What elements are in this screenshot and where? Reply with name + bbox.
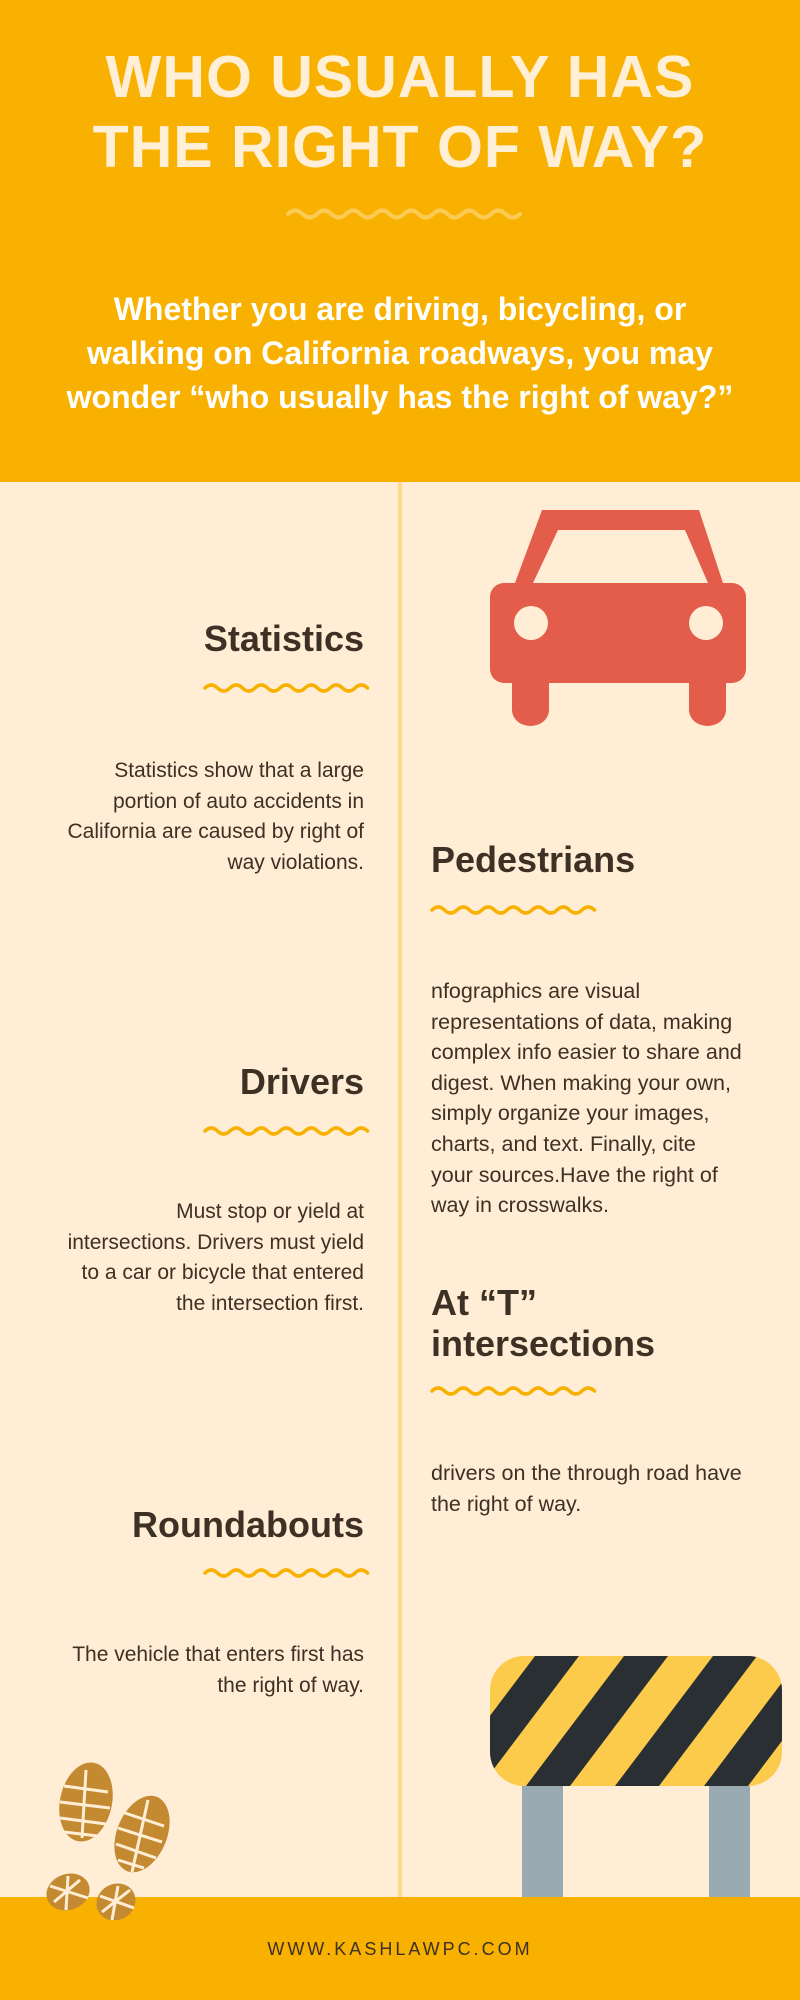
title: THE RIGHT OF WAY?: [93, 114, 707, 180]
subtitle: [66, 291, 733, 415]
text: pedestrians: [431, 979, 742, 1217]
heading: Statistics: Statistics: [204, 618, 364, 659]
text: pedestrians: nfographics are visual: [431, 979, 640, 1003]
subtitle: wonder “who usually has the right of way?”: [67, 379, 733, 415]
footer band: [0, 1897, 800, 2000]
icon: car: [490, 510, 746, 726]
header band: [0, 0, 800, 482]
center divider: [398, 482, 402, 1897]
text: pedestrians: charts, and text. Finally, cite: [431, 1132, 696, 1156]
text: pedestrians: simply organize your images,: [431, 1101, 709, 1125]
text: statistics: portion of auto accidents in: [113, 790, 364, 813]
text: T intersections: drivers on the through road have: [431, 1461, 742, 1485]
text: pedestrians: representations of data, making: [431, 1010, 732, 1034]
heading: Drivers: Drivers: [240, 1061, 364, 1102]
text: pedestrians: your sources.Have the right of: [431, 1163, 718, 1187]
heading: Roundabouts: Roundabouts: [132, 1504, 364, 1545]
text: drivers: [68, 1200, 364, 1315]
wave: roundabouts: [203, 1568, 370, 1578]
title: WHO USUALLY HAS: [106, 44, 694, 110]
text: drivers: to a car or bicycle that entered: [82, 1261, 364, 1284]
wave: T intersections: [430, 1386, 596, 1396]
text: statistics: [68, 759, 364, 874]
text: drivers: the intersection first.: [176, 1292, 364, 1315]
heading: At T intersections: At “T”: [431, 1282, 537, 1323]
text: statistics: way violations.: [227, 851, 364, 874]
text: T intersections: [431, 1461, 742, 1516]
text: pedestrians: way in crosswalks.: [431, 1193, 609, 1217]
subtitle: walking on California roadways, you may: [87, 335, 713, 371]
icon: barrier: [490, 1656, 782, 1897]
heading: At T intersections: [431, 1282, 655, 1364]
text: pedestrians: digest. When making your own,: [431, 1071, 731, 1095]
heading: Pedestrians: Pedestrians: [431, 839, 635, 880]
text: statistics: California are caused by right of: [68, 820, 364, 843]
header wave: [286, 208, 522, 220]
heading: At T intersections: intersections: [431, 1323, 655, 1364]
text: T intersections: the right of way.: [431, 1492, 581, 1516]
wave: statistics: [203, 683, 370, 693]
text: roundabouts: the right of way.: [217, 1674, 364, 1697]
text: statistics: Statistics show that a large: [114, 759, 364, 782]
text: drivers: Must stop or yield at: [176, 1200, 364, 1223]
text: roundabouts: [72, 1643, 364, 1697]
title: [93, 44, 707, 180]
text: roundabouts: The vehicle that enters first has: [72, 1643, 364, 1666]
footer url: WWW.KASHLAWPC.COM: [267, 1939, 533, 1959]
text: drivers: intersections. Drivers must yield: [68, 1231, 364, 1254]
wave: drivers: [203, 1126, 370, 1136]
icon: footprints: [46, 1762, 170, 1920]
text: pedestrians: complex info easier to share and: [431, 1040, 742, 1064]
subtitle: Whether you are driving, bicycling, or: [114, 291, 686, 327]
wave: pedestrians: [430, 905, 596, 915]
